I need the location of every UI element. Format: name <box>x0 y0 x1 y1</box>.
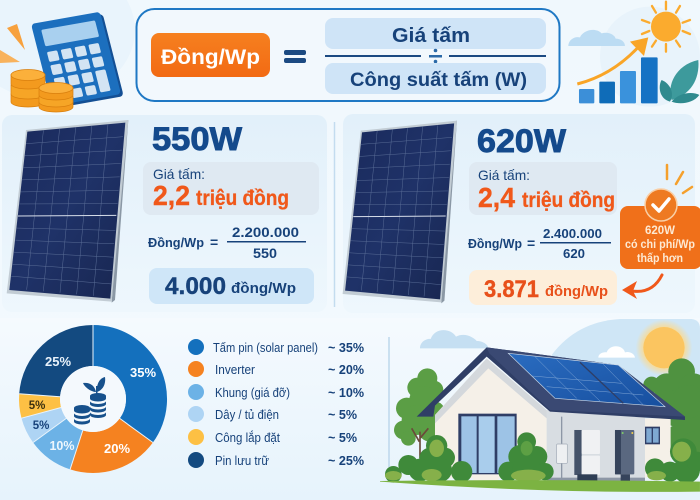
formula 550W <box>148 225 306 261</box>
legend item: solar panel: ~ 35% <box>328 340 364 355</box>
formula 550W: 2.200.000 <box>232 225 299 240</box>
legend item: frame: ~ 10% <box>328 385 364 400</box>
formula 620W: 2.400.000 <box>543 226 602 241</box>
result 620W: 3.871 <box>484 276 539 303</box>
legend item: installation: ~ 5% <box>328 430 357 445</box>
donut chart: cost share: 10% <box>49 439 75 453</box>
formula 620W: = <box>527 235 535 251</box>
panel: 550W <box>2 115 327 312</box>
solar panel image 550W <box>7 120 128 303</box>
legend item: installation <box>188 429 357 445</box>
solar panel image 620W <box>343 121 457 303</box>
donut chart: cost share: 5% <box>33 420 49 432</box>
callout: 620W cheaper per Wp <box>620 165 700 269</box>
callout: 620W cheaper per Wp: có chi phí/Wp <box>625 239 695 251</box>
result 550W: 4.000 <box>165 273 226 300</box>
legend item: wiring: Dây / tủ điện <box>215 408 279 422</box>
formula 620W: Đồng/Wp <box>468 236 522 251</box>
legend item: installation: Công lắp đặt <box>215 430 280 445</box>
donut chart: cost share: 5% <box>29 400 45 412</box>
formula 620W: 620 <box>563 246 585 261</box>
price box 550W: 2,2 <box>153 180 190 211</box>
denominator: Công suất tấm (W): Công suất tấm (W) <box>350 70 527 91</box>
donut chart: cost share: 20% <box>104 441 130 456</box>
donut chart: cost share <box>19 325 167 473</box>
price box 550W: Giá tấm: <box>153 166 205 182</box>
result 550W <box>149 268 314 304</box>
legend item: frame <box>188 384 364 400</box>
illustration: house with solar roof <box>380 319 700 492</box>
legend item: wiring <box>188 406 357 422</box>
legend item: inverter: Inverter <box>215 363 255 377</box>
equals sign <box>284 50 306 63</box>
legend item: solar panel <box>188 339 364 355</box>
price box 550W <box>143 162 319 215</box>
legend item: solar panel: Tấm pin (solar panel) <box>213 341 318 355</box>
vertical divider bottom <box>388 337 390 467</box>
legend item: wiring: ~ 5% <box>328 407 357 422</box>
fraction line with divide sign <box>325 49 546 63</box>
heading 550W: 550W <box>152 121 243 157</box>
formula 550W: 550 <box>253 246 277 261</box>
bottom section background <box>0 318 700 500</box>
formula 550W: Đồng/Wp <box>148 235 204 250</box>
badge: Đồng/Wp: Đồng/Wp <box>161 46 260 69</box>
formula 620W <box>468 226 611 261</box>
price box 620W: 2,4 <box>478 182 515 213</box>
icon: coins and plant <box>74 377 106 424</box>
legend item: storage: ~ 25% <box>328 453 364 468</box>
numerator: Giá tấm <box>325 18 546 49</box>
price box 620W: triệu đồng <box>522 189 615 212</box>
donut chart: cost share: 25% <box>45 354 71 369</box>
vertical divider left <box>334 122 336 307</box>
result 620W <box>469 270 617 305</box>
legend item: inverter <box>188 361 364 377</box>
badge: Đồng/Wp <box>151 33 270 77</box>
legend item: storage: Pin lưu trữ <box>215 454 269 468</box>
legend <box>188 339 364 468</box>
panel: 620W <box>343 114 695 313</box>
arrow: callout to result <box>622 275 662 299</box>
legend item: inverter: ~ 20% <box>328 362 364 377</box>
numerator: Giá tấm: Giá tấm <box>392 25 470 47</box>
callout: 620W cheaper per Wp: 620W <box>645 225 675 237</box>
result 550W: đồng/Wp <box>231 280 296 297</box>
price box 620W <box>469 162 617 215</box>
formula 550W: = <box>210 234 218 250</box>
price box 550W: triệu đồng <box>196 187 289 210</box>
formula card <box>136 9 560 101</box>
icon: calculator with coins <box>0 0 135 112</box>
legend item: frame: Khung (giá đỡ) <box>215 386 290 400</box>
price box 620W: Giá tấm: <box>478 167 530 183</box>
callout: 620W cheaper per Wp: thấp hơn <box>637 253 683 265</box>
denominator: Công suất tấm (W) <box>325 63 546 94</box>
legend item: storage <box>188 452 364 468</box>
heading 620W: 620W <box>477 123 567 159</box>
donut chart: cost share: 35% <box>130 365 156 380</box>
illustration: sun, cloud, growth chart <box>568 2 700 107</box>
result 620W: đồng/Wp <box>545 283 608 300</box>
